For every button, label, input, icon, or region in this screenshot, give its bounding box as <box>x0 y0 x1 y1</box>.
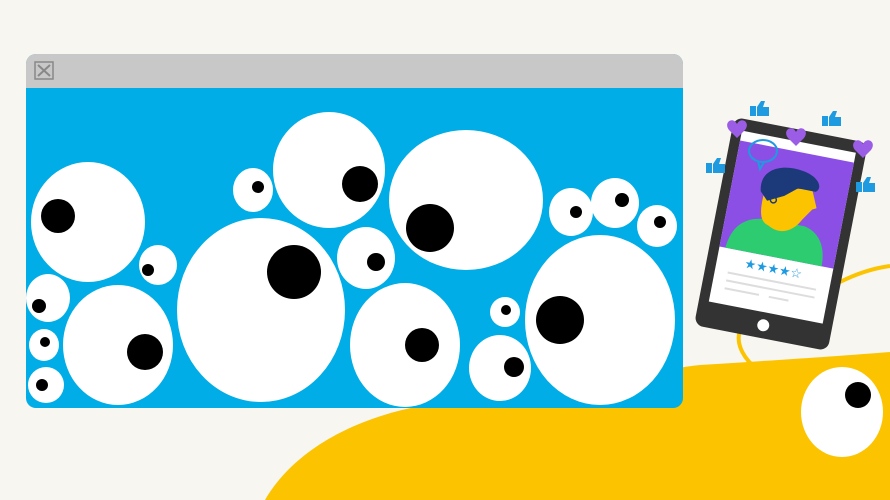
icons: hearts, likes, bubble <box>706 101 875 192</box>
yellow blob <box>265 266 890 500</box>
icon: close <box>35 62 53 79</box>
eyes grid <box>26 112 677 407</box>
person <box>725 158 839 266</box>
yellow creature eye <box>801 367 883 457</box>
stars: ★★★★☆ <box>743 256 803 282</box>
browser window <box>26 54 683 408</box>
tablet <box>694 117 868 351</box>
